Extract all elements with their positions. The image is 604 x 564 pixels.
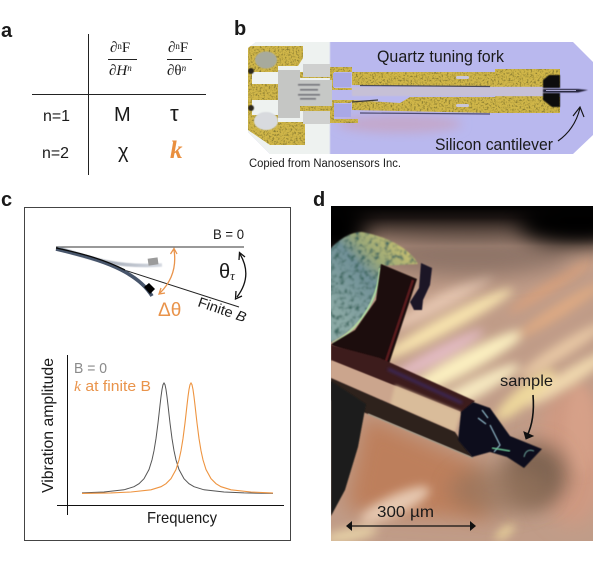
panel a: derivative table (32, 34, 206, 175)
label B = 0: B = 0 (213, 226, 244, 242)
electrode blob (331, 231, 418, 344)
label d: d (313, 189, 325, 211)
row label n=2: n=2 (42, 145, 69, 162)
curve k at finite B (82, 383, 273, 493)
grey sample (148, 257, 159, 266)
column header: dF/dθ: n (175, 41, 180, 51)
column header: dF/dθ: ∂θ (167, 63, 182, 79)
cantilever deflection diagram (56, 226, 249, 325)
column header: dF/dθ: ∂ (168, 40, 175, 56)
top vignette (331, 206, 593, 246)
label sample: sample (500, 373, 553, 390)
chip markings (298, 84, 320, 100)
x axis label: Frequency (147, 510, 217, 527)
arm slots (456, 76, 469, 79)
label: silicon cantilever: Silicon cantilever (435, 136, 553, 154)
arrow to cantilever (558, 107, 584, 141)
image credit: Copied from Nanosensors Inc. (249, 158, 401, 170)
shadow around sample (503, 443, 567, 507)
orange angle arrow (159, 248, 177, 294)
column header: dF/dH: ∂H (109, 63, 127, 79)
panel d: microscope photo (331, 206, 593, 541)
dark mount (331, 264, 417, 367)
lower cantilever arm (331, 378, 473, 458)
bottom-left copper wash (345, 415, 490, 520)
column header: dF/dH: F (122, 40, 130, 56)
cantilever head and sample (458, 402, 542, 468)
gold electrodes (248, 46, 560, 145)
delta theta label: Δθ (158, 300, 181, 321)
symbol k orange: k (170, 137, 183, 164)
line finite B (118, 268, 239, 307)
bright electrode rim (333, 268, 380, 343)
legend k at finite B: k at finite B (74, 378, 151, 395)
label b: b (234, 18, 246, 40)
photo background (248, 42, 593, 154)
panel c: frame and diagrams (24, 208, 290, 540)
small dark glue blob (410, 263, 432, 310)
photo background (331, 206, 593, 541)
column header: dF/dH: n (117, 41, 122, 51)
label c: c (1, 189, 12, 211)
column header: dF/dθ: F (180, 40, 188, 56)
column header: dF/dθ: n (182, 63, 187, 73)
right-side pink wash (540, 394, 593, 522)
column header: dF/dH: ∂ (110, 40, 117, 56)
y axis label: Vibration amplitude (40, 358, 57, 493)
row label n=1: n=1 (43, 108, 70, 125)
panel b: tuning fork photo (240, 36, 593, 170)
upper tan glow (370, 233, 570, 277)
arrow to sample (524, 395, 533, 439)
label: quartz tuning fork: Quartz tuning fork (377, 48, 505, 66)
scale bar (346, 521, 476, 531)
grey cantilever at zero field (58, 248, 162, 266)
theta tau label: θ (219, 261, 230, 283)
curve B = 0 (82, 383, 273, 493)
legend B = 0: B = 0 (74, 360, 107, 377)
central channel (352, 87, 547, 96)
symbol M: M (114, 104, 131, 126)
symbol chi: χ (118, 141, 129, 163)
dark cantilever at finite field (56, 249, 152, 296)
black sample (144, 283, 155, 294)
light slot between arms (331, 360, 461, 414)
axes (57, 355, 284, 515)
scale label: 300 µm (377, 504, 434, 521)
upper cantilever arm (331, 345, 475, 414)
black torque angle arrow (236, 252, 246, 299)
black fork tips (543, 75, 560, 107)
resonance chart (40, 355, 284, 527)
fork windows (333, 73, 351, 87)
lower-left dark mount (331, 381, 366, 516)
silver pads (255, 52, 277, 68)
label Finite B: Finite B (196, 294, 249, 325)
label a: a (1, 20, 13, 42)
column header: dF/dH (108, 40, 137, 79)
reference line B=0 (56, 246, 244, 248)
column header: dF/dθ (167, 40, 192, 79)
silicon cantilever (543, 89, 588, 92)
symbol tau: τ (170, 101, 179, 126)
grey fork body (278, 70, 300, 118)
column header: dF/dH: n (127, 63, 132, 73)
theta tau label: τ (230, 268, 236, 283)
light streaks (331, 262, 593, 541)
